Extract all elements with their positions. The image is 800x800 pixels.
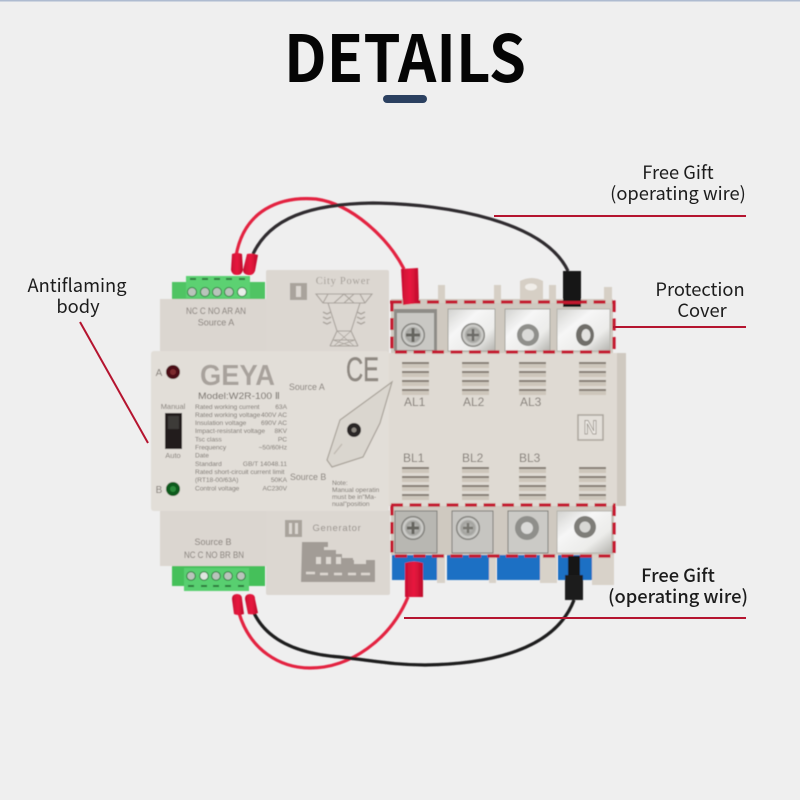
leader line: free gift bottom bbox=[404, 617, 746, 619]
terminal 4 bbox=[557, 511, 612, 553]
icon: generator bbox=[301, 542, 375, 582]
lower module text bbox=[184, 537, 244, 561]
model text: Model:W2R-100 Ⅱ bbox=[198, 391, 280, 402]
note text: Note: bbox=[332, 480, 348, 487]
specification table: Insulation voltage bbox=[195, 420, 247, 427]
source B text: Source B bbox=[290, 472, 326, 482]
bottom-left ferrules bbox=[232, 594, 258, 615]
phase labels: BL3 bbox=[519, 451, 541, 465]
city power text: City Power bbox=[316, 276, 370, 287]
upper terminal area bbox=[391, 278, 613, 354]
specification table: AC230V bbox=[262, 486, 288, 492]
bottom black connector bbox=[565, 556, 583, 600]
leader line: protection cover bbox=[613, 326, 746, 328]
phase labels: BL2 bbox=[462, 451, 484, 465]
top-left ferrules bbox=[231, 253, 258, 275]
LED B bbox=[156, 482, 180, 496]
terminal 3 bbox=[505, 309, 550, 351]
note text: Manual operatin bbox=[332, 487, 380, 494]
main front panel bbox=[151, 351, 392, 511]
LED A bbox=[156, 365, 180, 379]
lower module body bbox=[160, 510, 390, 595]
phase labels bbox=[403, 395, 542, 465]
source A text: Source A bbox=[289, 382, 325, 392]
lower green terminal block bbox=[172, 566, 265, 591]
upper module body bbox=[160, 270, 389, 354]
top red wire bbox=[236, 199, 404, 269]
specification table: 8KV bbox=[275, 428, 288, 435]
CE mark: CE bbox=[346, 351, 379, 389]
rotary handle bbox=[327, 382, 392, 467]
red dashed outline: bottom terminals bbox=[391, 505, 614, 556]
top black wire bbox=[253, 203, 568, 271]
roman numeral II badge bbox=[285, 520, 302, 537]
neutral N badge: N bbox=[584, 418, 597, 439]
top border line bbox=[0, 0, 800, 2]
specification table: ~50/60Hz bbox=[259, 444, 287, 452]
manual/auto switch: Manual bbox=[161, 402, 186, 411]
label: antiflaming body: body bbox=[56, 293, 100, 319]
manual/auto switch bbox=[161, 402, 186, 460]
right cover panel bbox=[388, 353, 626, 506]
phase labels: AL1 bbox=[404, 395, 426, 409]
icon: power pylon bbox=[316, 294, 372, 346]
label: antiflaming body: Antiflaming bbox=[27, 272, 127, 298]
specification table: 690V AC bbox=[261, 420, 287, 427]
terminal 3 bbox=[508, 511, 548, 553]
label: protection cover: Cover bbox=[677, 297, 728, 323]
specification table: Rated working voltage bbox=[195, 412, 261, 419]
lower module text: Source B bbox=[194, 537, 232, 547]
upper module text bbox=[186, 306, 246, 328]
manual/auto switch: Auto bbox=[165, 451, 181, 460]
specification table: Date bbox=[195, 452, 209, 460]
label: free gift bottom: (operating wire) bbox=[608, 583, 748, 609]
label: free gift bottom: Free Gift bbox=[641, 562, 715, 588]
bottom red connector bbox=[405, 562, 423, 597]
product: automatic transfer switch bbox=[151, 199, 626, 668]
specification table: Impact-resistant voltage bbox=[195, 428, 265, 435]
title underline accent bbox=[383, 95, 427, 103]
leader line: antiflaming body bbox=[80, 322, 148, 443]
terminal 1 bbox=[395, 511, 437, 553]
specification table: Rated short-circuit current limit bbox=[195, 469, 285, 476]
specification table: Tsc class bbox=[195, 436, 222, 444]
neutral N badge bbox=[578, 415, 603, 440]
specification table: PC bbox=[278, 436, 287, 444]
specification table: GB/T 14048.11 bbox=[243, 461, 287, 468]
LED B: B bbox=[156, 485, 163, 496]
upper module text: Source A bbox=[198, 318, 234, 328]
lower module text: NC C NO BR BN bbox=[184, 550, 244, 561]
top black connector bbox=[563, 271, 581, 307]
LED A: A bbox=[156, 368, 163, 379]
terminal 4 bbox=[557, 309, 610, 351]
phase labels: AL2 bbox=[463, 395, 485, 409]
specification table: (RT18-00/63A) bbox=[195, 477, 238, 484]
specification table: 50KA bbox=[271, 477, 288, 484]
specification table: 400V AC bbox=[261, 412, 287, 419]
specification table: Standard bbox=[195, 461, 222, 468]
red dashed outline: top terminals bbox=[390, 302, 614, 352]
bottom red wire bbox=[239, 597, 408, 668]
title: DETAILS bbox=[284, 7, 526, 101]
specification table: Frequency bbox=[195, 444, 227, 452]
top red connector bbox=[401, 268, 419, 305]
upper green terminal block bbox=[172, 276, 265, 299]
note text: nual"position bbox=[332, 501, 370, 508]
terminal 2 bbox=[448, 309, 495, 351]
note text bbox=[332, 480, 380, 508]
label: protection cover: Protection bbox=[655, 276, 745, 302]
lower terminal area bbox=[391, 505, 614, 585]
label: free gift top: Free Gift bbox=[642, 159, 714, 185]
bottom black wire bbox=[254, 600, 574, 665]
blue base bbox=[392, 552, 592, 580]
leader line: free gift top bbox=[494, 215, 746, 217]
phase labels: BL1 bbox=[403, 451, 425, 465]
phase labels: AL3 bbox=[520, 395, 542, 409]
roman numeral I badge bbox=[290, 283, 307, 300]
note text: must be in"Ma- bbox=[332, 494, 376, 501]
specification table: Rated working current bbox=[195, 404, 260, 411]
terminal 1 bbox=[394, 309, 437, 351]
mounting hole bbox=[525, 284, 537, 290]
vent slots bbox=[402, 362, 606, 500]
terminal 2 bbox=[452, 511, 493, 553]
GEYA logo: GEYA bbox=[200, 360, 275, 392]
specification table: Control voltage bbox=[195, 486, 240, 492]
specification table: 63A bbox=[275, 404, 288, 411]
upper module text: NC C NO AR AN bbox=[186, 306, 246, 317]
lower tabs bbox=[437, 552, 614, 585]
specification table bbox=[195, 404, 288, 492]
mounting tabs bbox=[438, 278, 612, 303]
generator text: Generator bbox=[312, 523, 362, 534]
label: free gift top: (operating wire) bbox=[610, 180, 746, 206]
